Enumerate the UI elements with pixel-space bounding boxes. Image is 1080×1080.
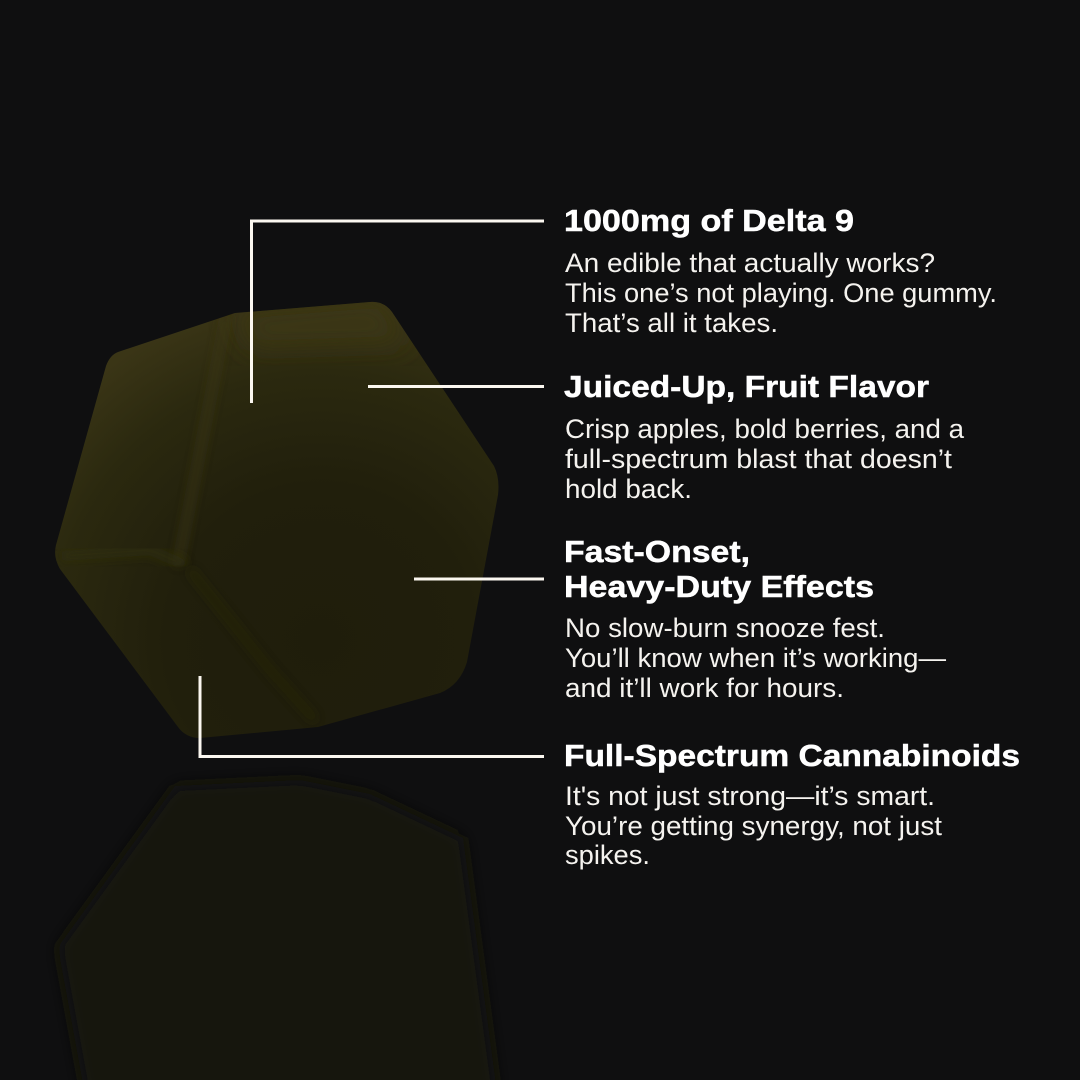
body <box>565 613 946 703</box>
text block: Juiced-Up, Fruit Flavor <box>564 369 965 504</box>
body: full-spectrum blast that doesn’t <box>565 444 953 474</box>
heading: Fast-Onset, <box>564 534 750 569</box>
body: You’ll know when it’s working— <box>565 643 946 673</box>
body: Crisp apples, bold berries, and a <box>565 414 965 444</box>
body: and it’ll work for hours. <box>565 673 844 703</box>
text block: 1000mg of Delta 9 <box>564 203 997 338</box>
leader line: Fast-Onset <box>414 578 544 580</box>
body: That’s all it takes. <box>565 308 778 338</box>
body <box>565 248 997 338</box>
heading: Full-Spectrum Cannabinoids <box>564 738 1020 773</box>
ridge highlights <box>176 453 202 556</box>
body: No slow-burn snooze fest. <box>565 613 885 643</box>
gummy product <box>55 302 498 738</box>
heading: 1000mg of Delta 9 <box>564 203 854 238</box>
body: spikes. <box>565 840 650 870</box>
heading <box>564 534 874 604</box>
heading: Juiced-Up, Fruit Flavor <box>564 369 929 404</box>
leader line: 1000mg of Delta 9 <box>252 221 544 403</box>
body: hold back. <box>565 474 692 504</box>
reflection of gummy <box>58 780 498 1080</box>
heading: Heavy-Duty Effects <box>564 569 874 604</box>
body: It's not just strong—it’s smart. <box>565 781 935 811</box>
body <box>565 414 965 504</box>
leader line: Juiced-Up, Fruit Flavor <box>368 385 544 388</box>
callout lines <box>200 221 544 756</box>
body <box>565 781 943 870</box>
body: An edible that actually works? <box>565 248 935 278</box>
body: This one’s not playing. One gummy. <box>565 278 997 308</box>
top sheen <box>293 331 328 338</box>
text block: Fast-Onset, Heavy-Duty Effects <box>564 534 946 703</box>
body: You’re getting synergy, not just <box>565 811 943 841</box>
text block: Full-Spectrum Cannabinoids <box>564 738 1020 870</box>
leader line: Full-Spectrum Cannabinoids <box>200 676 544 756</box>
